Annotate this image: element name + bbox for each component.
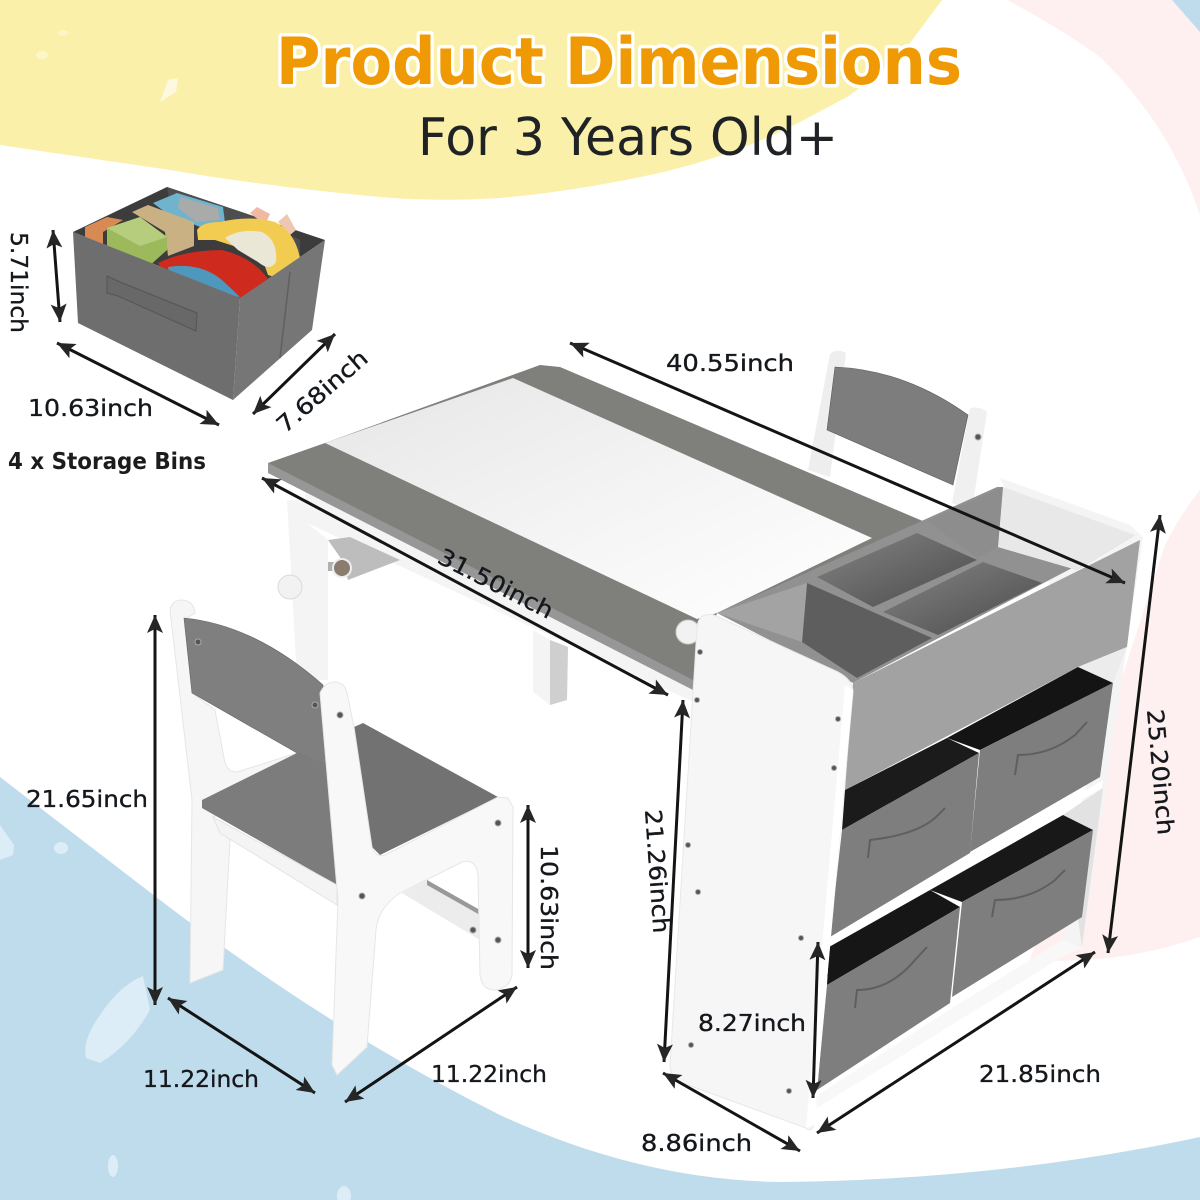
table top <box>268 365 925 692</box>
storage unit <box>670 478 1143 1130</box>
storage bin photo <box>73 187 325 400</box>
unit screws <box>686 650 840 1094</box>
middle shelf <box>830 780 1103 947</box>
tray front panel <box>845 540 1140 790</box>
unit right panel <box>1000 478 1143 947</box>
bin label: width: 10.63inch <box>28 396 153 422</box>
front chair <box>170 600 513 1075</box>
plush toy <box>158 207 300 298</box>
paper sheet <box>325 378 872 619</box>
label: chair width: 11.22inch <box>143 1067 259 1093</box>
chair stretcher <box>402 880 480 940</box>
label: chair height: 21.65inch <box>26 787 148 813</box>
bin label: depth: 7.68inch <box>272 345 373 439</box>
bin handle <box>107 276 197 331</box>
table legs and rail <box>278 492 700 705</box>
subtitle: For 3 Years Old+ <box>418 108 838 168</box>
bin arrows <box>53 230 335 425</box>
unit left panel <box>670 615 853 1130</box>
label: unit depth: 8.86inch <box>641 1131 752 1157</box>
top tray <box>676 487 1135 683</box>
bin label: height: 5.71inch <box>5 232 31 333</box>
label: chair depth: 11.22inch <box>431 1062 547 1088</box>
label: table length: 40.55inch <box>666 351 794 377</box>
table arrows <box>262 343 1125 695</box>
chair seat <box>202 753 337 885</box>
upper right bin <box>947 667 1113 852</box>
upper left bin <box>830 738 979 937</box>
label: unit width: 21.85inch <box>979 1062 1101 1088</box>
label: seat height: 10.63inch <box>535 845 561 970</box>
title: Product Dimensions <box>276 25 962 100</box>
label: table width: 31.50inch <box>433 544 557 625</box>
toy blocks <box>85 193 225 268</box>
chair screws <box>195 639 501 943</box>
paper roller <box>278 537 400 599</box>
lower left bin <box>817 890 960 1090</box>
back chair <box>808 351 987 510</box>
label: bin slot height: 8.27inch <box>698 1011 806 1037</box>
chair back panel <box>184 618 327 765</box>
label: unit height: 25.20inch <box>1141 708 1178 836</box>
bin count label: 4 x Storage Bins <box>8 449 206 475</box>
bottom shelf <box>815 940 1082 1108</box>
storage unit arrows <box>663 515 1160 1151</box>
label: unit side height: 21.26inch <box>639 809 674 934</box>
chair arrows <box>155 615 528 1102</box>
lower right bin <box>930 815 1093 997</box>
chair front frame <box>320 682 513 1075</box>
